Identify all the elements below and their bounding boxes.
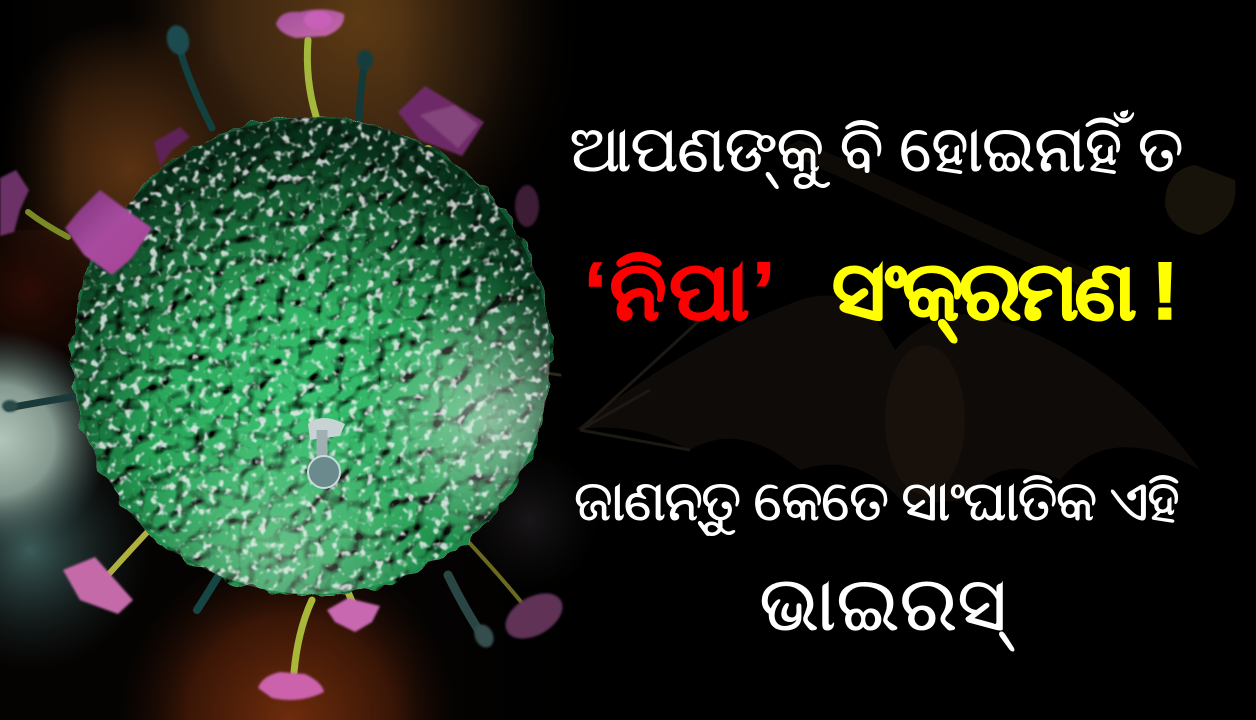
line 4: subhead: ଭାଇରସ୍ bbox=[759, 562, 1007, 647]
line 3: subhead: ଜାଣନ୍ତୁ କେତେ ସାଂଘାତିକ ଏହି bbox=[574, 469, 1178, 532]
faint bat silhouette bbox=[575, 140, 1236, 505]
blurred background: left glow bbox=[0, 0, 620, 720]
red word: ‘ନିପା’ bbox=[584, 246, 778, 337]
pin on sphere bbox=[308, 418, 345, 488]
yellow word: ସଂକ୍ରମଣ ! bbox=[832, 246, 1175, 337]
virus sphere bbox=[72, 116, 552, 596]
line 1: headline: ଆପଣଙ୍କୁ ବି ହୋଇନାହିଁ ତ bbox=[569, 113, 1183, 185]
line 2: highlighted headline bbox=[584, 246, 1175, 344]
spike stems bbox=[8, 40, 560, 672]
spike heads bbox=[0, 9, 570, 700]
